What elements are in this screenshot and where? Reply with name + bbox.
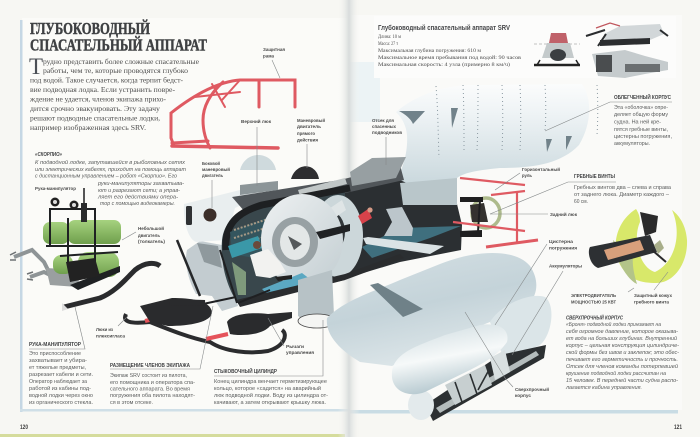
rear upper hull	[393, 84, 598, 205]
block: pressure hull: ет вода на больших глубинах. Внутренний	[566, 335, 677, 342]
block: pressure hull: 15 человек. В передней части судна распо-	[566, 377, 678, 384]
specs panel: Длина: 10 м	[378, 34, 401, 40]
label: rescue compartment: подводников	[372, 130, 402, 135]
label: ballast tank	[495, 239, 577, 325]
block: arm manipulator: водной лодки через окно	[29, 392, 93, 399]
rear deck machinery	[350, 157, 406, 186]
label: direct thruster: Маневровый	[297, 117, 325, 123]
block: propellers: ГРЕБНЫЕ ВИНТЫ	[574, 174, 615, 180]
label: rear hatch	[490, 211, 578, 217]
hatch handle	[316, 224, 350, 239]
label: side thruster: Боковой	[202, 160, 220, 166]
block: docking cylinder: кольцо, которое «садится» на аварийный	[214, 385, 321, 392]
lower skid	[125, 314, 285, 352]
block: pressure hull: крушение подводной лодки рассчитан на	[566, 370, 666, 377]
forward bulkhead disc	[261, 194, 343, 286]
front thruster cylinder	[140, 298, 212, 326]
label: propeller guard: гребного винта	[634, 298, 669, 304]
white forward nose	[184, 190, 262, 242]
block: arm manipulator: работой из кабины под-	[29, 385, 91, 392]
label: arm manipulator top: Рука-манипулятор	[35, 186, 76, 191]
hull slots	[399, 108, 572, 152]
label: protective frame: Защитная	[263, 47, 285, 52]
block: light hull: цистерны погружения,	[614, 134, 672, 140]
block: pressure hull: печивает его герметичность и прочность.	[566, 357, 678, 363]
block: crew placement: Экипаж SRV состоит из пилота,	[110, 373, 187, 379]
specs panel: Максимальная глубина погружения: 610 м	[378, 47, 482, 54]
block: propellers: от заднего люка. Диаметр каждого –	[574, 192, 670, 198]
docking cylinder	[298, 270, 336, 328]
Scorpio text block: с дистанционным управлением – робот «Скорпио». Его	[35, 174, 177, 180]
grey crew member	[384, 207, 413, 236]
rivet rows	[436, 85, 598, 158]
label: electric motor: ЭЛЕКТРОДВИГАТЕЛЬ	[571, 293, 617, 298]
block: arm manipulator: Это приспособление	[29, 351, 81, 357]
block: docking cylinder: СТЫКОВОЧНЫЙ ЦИЛИНДР	[214, 367, 277, 375]
intro text: Т	[29, 54, 43, 79]
pale dome behind hatch	[240, 155, 276, 170]
intro text: под водой. Такое случается, когда терпит бедст-	[30, 76, 184, 84]
label: small thruster: Небольшой	[138, 225, 164, 231]
label: batteries: Аккумуляторы	[549, 264, 582, 268]
label: horizontal rudder: руль	[522, 173, 532, 178]
protective frame, red	[171, 80, 295, 148]
block: propellers: Гребных винтов два – слева и справа	[574, 185, 672, 191]
label: ballast tank: Цистерна	[549, 239, 573, 244]
lower capsule	[408, 390, 434, 420]
Scorpio text block: ют и разрезают сети; а управ-	[98, 188, 180, 194]
dark thruster dome	[291, 166, 319, 179]
title	[30, 19, 207, 54]
label: electric motor	[571, 288, 634, 304]
label: batteries	[512, 264, 582, 355]
label: direct thruster: прямого	[297, 131, 315, 136]
block: arm manipulator: ет тяжелые предметы,	[29, 365, 86, 371]
title: ГЛУБОКОВОДНЫЙ	[30, 19, 150, 38]
block: arm manipulator	[29, 307, 93, 406]
block: docking cylinder	[214, 320, 328, 406]
label: electric motor: МОЩНОСТЬЮ 25 КВТ	[571, 300, 616, 304]
Scorpio text block: тор с помощью видеокамеры.	[100, 201, 175, 207]
label: propeller guard	[634, 272, 672, 304]
block: pressure hull	[565, 314, 679, 391]
rod from nose	[177, 240, 200, 296]
central gutter	[338, 0, 360, 437]
page number 120: 120	[20, 425, 29, 431]
block: docking cylinder: качивают, а затем открывают крышку люка.	[214, 400, 326, 406]
aft bulkhead disc	[313, 195, 363, 277]
block: light hull: деляет общую форму	[614, 112, 668, 118]
hull slot	[370, 283, 423, 317]
block: pressure hull: ской формы без швов и заклепок; это обес-	[566, 349, 679, 356]
lower main hull	[327, 253, 536, 366]
specs panel: Максимальная скорость: 4 узла (примерно 8 км/ч)	[378, 61, 510, 68]
Scorpio text block: или электрических кабелях, приходит на помощь аппарат	[35, 167, 187, 173]
block: crew placement: его помощника и оператора спа-	[110, 380, 195, 386]
Scorpio text block: «СКОРПИО»	[35, 152, 62, 158]
label: rescue compartment: Отсек для	[372, 118, 394, 123]
track keel	[425, 345, 546, 421]
specs panel	[374, 16, 676, 78]
intro text: вие подводная лодка. Если устранить повре-	[30, 85, 176, 94]
Scorpio ROV	[10, 188, 121, 290]
label: rescue compartment: спасенных	[372, 124, 396, 129]
red crew member	[358, 207, 373, 224]
Scorpio text block	[35, 152, 187, 207]
frame	[46, 209, 120, 265]
label: protective frame: рама	[263, 54, 274, 58]
instrument panel	[230, 218, 284, 258]
intro text: дится срочно эвакуировать. Эту задачу	[30, 104, 160, 113]
label: propeller guard: Защитный кожух	[634, 292, 672, 298]
camera	[81, 203, 87, 222]
aft grey block	[400, 178, 457, 205]
label: rear hatch: Задний люк	[550, 211, 578, 217]
left page panel frame	[20, 18, 350, 412]
label: control levers: управления	[286, 350, 314, 355]
block: pressure hull: лагается кабина управления.	[565, 385, 642, 391]
deck band	[232, 165, 404, 212]
interior strut	[203, 250, 270, 304]
nose thruster and port	[186, 206, 216, 225]
block: pressure hull: корпус – цельная конструкция цилиндриче-	[566, 343, 679, 349]
base	[70, 266, 120, 290]
label: side thruster	[202, 160, 230, 208]
upper capsule	[392, 324, 508, 394]
label: control levers	[268, 318, 314, 355]
label: ballast tank: погружения	[549, 246, 577, 250]
label: plexiglass hatches: Люки из	[96, 327, 114, 332]
label: direct thruster: двигатель	[297, 124, 321, 129]
block: arm manipulator: РУКА-МАНИПУЛЯТОР	[29, 342, 81, 348]
block: crew placement: сательного аппарата. Во время	[110, 386, 190, 392]
blue floor	[262, 273, 315, 297]
keel strip	[236, 254, 404, 307]
block: light hull	[545, 93, 672, 147]
aft dark compartment	[300, 178, 462, 290]
right capsule	[490, 296, 551, 362]
bottom page edge	[0, 434, 345, 437]
block: propellers	[490, 174, 672, 214]
label: horizontal rudder	[495, 166, 560, 190]
block: light hull: аккумуляторы.	[614, 141, 650, 147]
label: plexiglass hatches	[96, 316, 128, 338]
label: small thruster: двигатель	[138, 233, 160, 238]
label: strong hull	[465, 312, 549, 398]
right page panel frame	[350, 15, 682, 414]
block: pressure hull: «Броня» подводной лодки принимает на	[566, 321, 661, 328]
intro text: работы, чем те, которые проводятся глубоко	[43, 66, 188, 75]
block: arm manipulator: из органического стекла.	[29, 400, 93, 406]
seated crew member	[250, 241, 292, 281]
label: strong hull: корпус	[515, 393, 531, 398]
ladder	[298, 178, 347, 196]
pale deck plate	[363, 237, 444, 254]
label: small thruster	[122, 225, 165, 244]
label: upper hatch: Верхний люк	[241, 118, 272, 124]
block: light hull: судна. На ней кре-	[614, 118, 661, 126]
label: plexiglass hatches: плексигласа	[96, 334, 125, 338]
electric motor and propeller	[589, 209, 687, 284]
label: upper hatch	[241, 118, 272, 186]
label: horizontal rudder: Горизонтальный	[522, 166, 560, 172]
upper green pods	[43, 222, 69, 244]
dark cockpit arch	[226, 188, 350, 250]
label: control levers: Рычаги	[286, 344, 304, 349]
page number 121: 121	[674, 425, 683, 431]
label: direct thruster: действия	[297, 136, 318, 142]
block: crew placement: погружения оба пилота находят-	[110, 393, 195, 399]
block: crew placement: ся в этом отсеке.	[110, 400, 153, 406]
block: pressure hull: себя огромное давление, которое оказыва-	[566, 329, 678, 335]
specs panel: Максимальное время пребывания под водой: 90 часов	[378, 54, 522, 61]
block: pressure hull: Отсек для членов команды потерпевшей	[566, 363, 678, 370]
block: crew placement	[110, 306, 213, 406]
intro text	[29, 54, 200, 132]
block: docking cylinder: люк подводной лодки. Воду из цилиндра от-	[214, 392, 328, 399]
label: strong hull: Сверхпрочный	[515, 386, 549, 392]
lights	[50, 198, 60, 206]
label: protective frame	[263, 47, 285, 78]
aft propeller and frame	[453, 178, 538, 247]
grey lower nose	[186, 241, 238, 311]
intro text: например изображенная здесь SRV.	[30, 123, 146, 132]
block: light hull: пятся гребные винты,	[614, 127, 668, 133]
label: side thruster: маневровый	[202, 166, 230, 172]
intro text: рудно представить более сложные спасательные	[43, 57, 200, 66]
arms	[14, 250, 60, 280]
specs panel: Глубоководный спасательный аппарат SRV	[378, 24, 510, 32]
submersible illustration	[10, 80, 687, 421]
block: crew placement: РАЗМЕЩЕНИЕ ЧЛЕНОВ ЭКИПАЖА	[110, 363, 190, 369]
block: pressure hull: СВЕРХПРОЧНЫЙ КОРПУС	[566, 314, 624, 322]
intro text: решают подводные спасательные лодки,	[30, 114, 160, 122]
lower green pods	[53, 255, 73, 274]
top view thumbnail	[592, 50, 668, 78]
Scorpio text block: ляет его действиями опера-	[97, 194, 178, 200]
title: СПАСАТЕЛЬНЫЙ АППАРАТ	[30, 36, 207, 54]
block: arm manipulator: Оператор наблюдает за	[29, 379, 87, 385]
side arm	[62, 263, 160, 311]
side view thumbnail	[586, 23, 668, 46]
label: direct thruster	[297, 117, 325, 168]
upper hatch ring	[240, 181, 278, 195]
specs panel: Масса: 27 т	[378, 41, 398, 47]
block: arm manipulator: разрезает кабели и сети.	[29, 372, 93, 378]
interior cockpit	[222, 192, 345, 303]
label: small thruster: (толкатель)	[138, 239, 165, 244]
Scorpio text block: К подводной лодке, запутавшейся в рыболовных сетях	[35, 159, 185, 166]
rear thruster cylinder	[227, 312, 292, 335]
intro text: ждение не удается, членов экипажа прихо-	[29, 94, 167, 104]
Scorpio text block: руки-манипуляторы захватыва-	[97, 181, 184, 187]
central cutaway body	[184, 157, 462, 311]
front view thumbnail	[534, 33, 580, 65]
block: light hull: ОБЛЕГЧЕННЫЙ КОРПУС	[614, 93, 671, 101]
block: arm manipulator: захватывает и убира-	[29, 358, 87, 364]
block: propellers: 60 см.	[574, 199, 588, 205]
block: docking cylinder: Конец цилиндра венчает герметизирующее	[214, 379, 327, 385]
block: light hull: Эта «оболочка» опре-	[614, 105, 668, 111]
label: side thruster: двигатель	[202, 173, 223, 178]
label: rescue compartment	[372, 118, 402, 165]
